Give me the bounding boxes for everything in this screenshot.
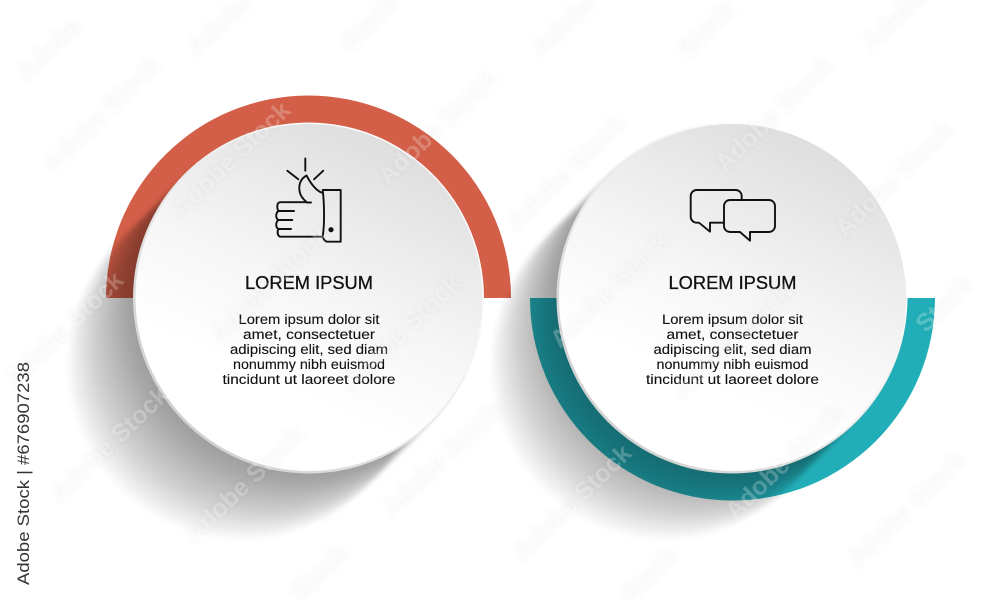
- watermarks: Adobe Stock: [167, 96, 296, 222]
- text block: right: amet, consectetuer: [666, 327, 799, 342]
- text block: left: tincidunt ut laoreet dolore: [222, 372, 396, 387]
- watermarks: Adobe Stock: [710, 51, 839, 177]
- watermarks: Adobe Stock: [830, 116, 959, 242]
- icon: thumbs up: [276, 158, 341, 242]
- watermarks: Adobe Stock: [205, 221, 334, 347]
- red half ring: [106, 96, 511, 298]
- watermarks: Adobe Stock: [842, 446, 971, 572]
- watermarks: Stock: [910, 270, 979, 338]
- text block: right: Lorem ipsum dolor sit: [662, 312, 803, 327]
- watermarks: Adobe Stock: [337, 269, 466, 395]
- watermarks: Adobe Stock: [37, 51, 166, 177]
- text block: left: adipiscing elit, sed diam: [230, 342, 388, 357]
- text block: left: amet, consectetuer: [243, 327, 376, 342]
- watermarks: Adobe Stock: [545, 227, 674, 353]
- watermarks: Adobe Stock: [720, 399, 849, 525]
- watermarks: Adobe: [12, 12, 87, 86]
- watermarks: Adobe Stock: [0, 266, 129, 392]
- text block: right: tincidunt ut laoreet dolore: [646, 372, 819, 387]
- watermarks: Adobe Stock: [502, 109, 631, 235]
- watermarks: Adobe Stock: [45, 381, 174, 507]
- teal half ring: [530, 298, 935, 501]
- panel: right circle: [556, 122, 908, 474]
- text block: right: adipiscing elit, sed diam: [654, 342, 812, 357]
- text block: left: nonummy nibh euismod: [233, 357, 385, 372]
- watermarks: Adobe Stock: [373, 64, 502, 190]
- text block: left: [222, 312, 396, 387]
- icon: speech bubbles: [691, 190, 775, 241]
- panel: left circle: [133, 122, 484, 474]
- heading: left: LOREM IPSUM: [245, 273, 373, 293]
- watermarks: Adobe Stock: [180, 421, 309, 547]
- watermarks: Adobe Stock: [668, 277, 797, 403]
- long shadow: right circle: [491, 126, 904, 539]
- watermarks: Adobe Stock: [377, 396, 506, 522]
- long shadow: left circle: [68, 126, 480, 539]
- text block: right: nonummy nibh euismod: [656, 357, 808, 372]
- heading: right: LOREM IPSUM: [668, 273, 796, 293]
- side credit: Adobe Stock | #676907238: [14, 362, 33, 585]
- watermarks: Adobe Stock: [508, 439, 637, 565]
- text block: left: Lorem ipsum dolor sit: [238, 312, 380, 327]
- text block: right: [646, 312, 819, 387]
